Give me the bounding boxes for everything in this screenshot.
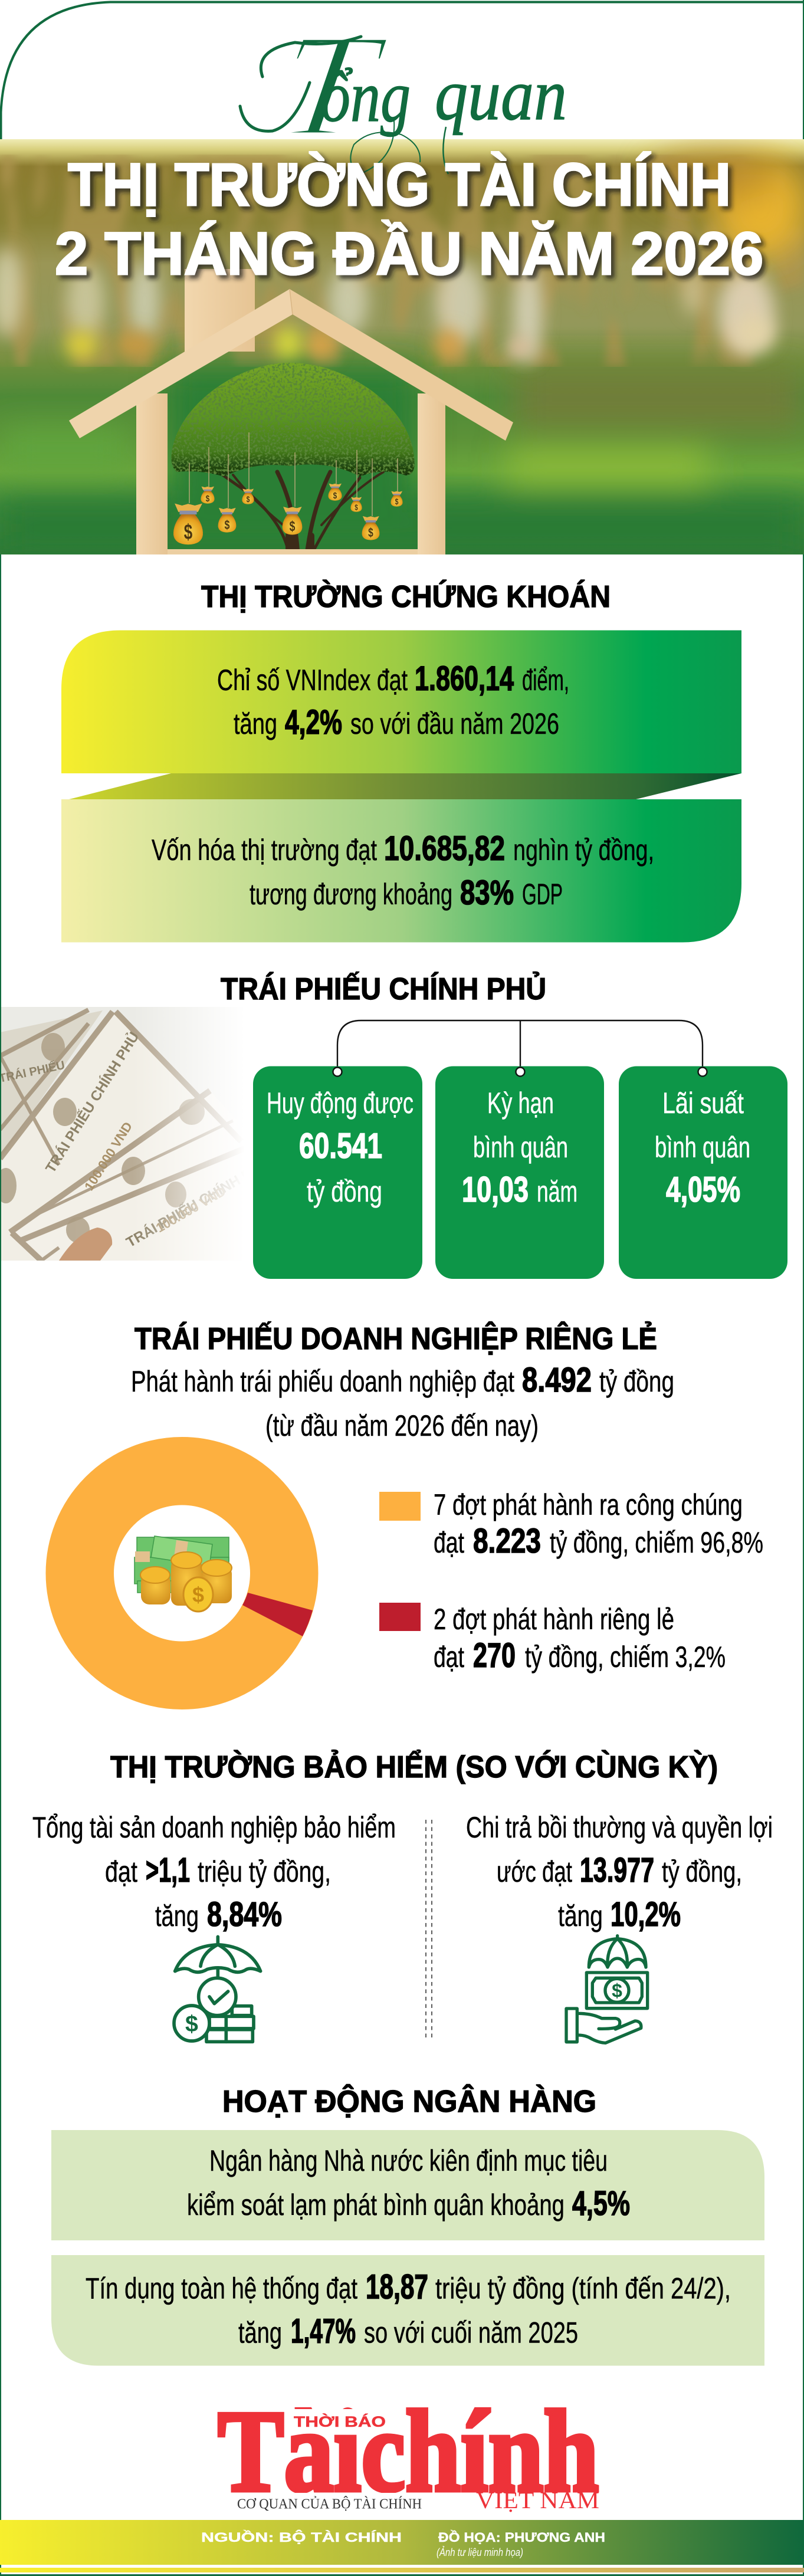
panel: average interest rate: bình quân xyxy=(655,1131,750,1164)
panel: amount raised xyxy=(253,1067,422,1279)
icon: money and coins: $ xyxy=(192,1583,204,1607)
text: insurance assets: tăng xyxy=(155,1899,199,1932)
text: market capitalization: 83% xyxy=(460,874,514,912)
text: insurance payouts: 10,2% xyxy=(611,1895,681,1934)
legend: private issuance: 2 đợt phát hành riêng lẻ xyxy=(434,1603,674,1636)
donut chart xyxy=(80,1471,313,1675)
text: corporate bonds summary: (từ đầu năm 2026 đến nay) xyxy=(265,1409,539,1442)
text: corporate bonds summary: Phát hành trái phiếu doanh nghiệp đạt xyxy=(131,1365,514,1398)
text: corporate bonds summary: tỷ đồng xyxy=(599,1365,674,1398)
ribbon top box xyxy=(61,630,741,773)
icon: umbrella, banknote and hand: $ xyxy=(612,1980,622,2001)
legend: private issuance: tỷ đồng, chiếm 3,2% xyxy=(525,1640,726,1673)
panel: system credit: triệu tỷ đồng (tính đến 24/2), xyxy=(435,2272,731,2305)
logo: Thời báo Tài chính Việt Nam: Tàichính xyxy=(218,2387,599,2516)
text: VNIndex: điểm, xyxy=(522,664,569,697)
icon: umbrella protecting coins: $ xyxy=(185,2011,198,2037)
money bags xyxy=(173,484,403,544)
panel: inflation target: kiểm soát lạm phát bình quân khoảng xyxy=(187,2188,565,2221)
title: Thị trường tài chính 2 tháng đầu năm 2026: THỊ TRƯỜNG TÀI CHÍNH xyxy=(68,151,731,218)
icon: umbrella, banknote and hand xyxy=(566,1936,648,2043)
icon: umbrella protecting coins xyxy=(174,1937,261,2042)
hero photo: wooden house and money tree xyxy=(0,139,804,554)
panel: system credit: 1,47% xyxy=(291,2312,356,2350)
panel: inflation target: 4,5% xyxy=(572,2184,630,2223)
text: VNIndex: Chỉ số VNIndex đạt xyxy=(217,664,408,697)
text: VNIndex: so với đầu năm 2026 xyxy=(350,707,559,740)
panel: average term xyxy=(435,1067,604,1279)
panel: system credit xyxy=(51,2255,764,2365)
text: insurance payouts: tăng xyxy=(558,1899,603,1932)
text: VNIndex: 4,2% xyxy=(285,703,342,741)
legend: public issuance xyxy=(379,1488,763,1560)
photo: government bond certificates: 100.000 VND xyxy=(81,1119,135,1193)
text: insurance assets: 8,84% xyxy=(207,1895,282,1934)
text: VNIndex: tăng xyxy=(234,707,277,740)
title: Thị trường tài chính 2 tháng đầu năm 2026 xyxy=(55,151,763,287)
logo: Thời báo Tài chính Việt Nam: THỜI BÁO xyxy=(294,2413,386,2430)
text: market capitalization: GDP xyxy=(522,878,563,911)
footer band: source and credits: NGUỒN: BỘ TÀI CHÍNH xyxy=(201,2530,402,2545)
panel: amount raised: 60.541 xyxy=(299,1126,382,1166)
logo: Thời báo Tài chính Việt Nam: CƠ QUAN CỦA BỘ TÀI CHÍNH xyxy=(237,2496,422,2512)
heading: government bonds: TRÁI PHIẾU CHÍNH PHỦ xyxy=(221,972,546,1006)
text: insurance assets: đạt xyxy=(105,1855,137,1888)
legend: private issuance: 270 xyxy=(473,1636,516,1675)
hanging strings xyxy=(189,432,398,516)
heading: corporate bonds: TRÁI PHIẾU DOANH NGHIỆP RIÊNG LẺ xyxy=(134,1321,657,1356)
photo: government bond certificates: TRÁI PHIẾU CHÍNH PHỦ xyxy=(123,1154,273,1251)
text: market capitalization xyxy=(152,829,654,912)
text: insurance assets xyxy=(32,1811,396,1934)
text: market capitalization: Vốn hóa thị trường đạt xyxy=(152,833,377,867)
text: corporate bonds summary xyxy=(131,1361,674,1442)
panel: average interest rate: Lãi suất xyxy=(662,1087,744,1120)
logo: Thời báo Tài chính Việt Nam: VIỆT NAM xyxy=(476,2487,599,2513)
panel: average term: Kỳ hạn xyxy=(487,1087,554,1120)
text: VNIndex xyxy=(217,659,569,741)
text: market capitalization: tương đương khoảng xyxy=(250,878,452,911)
blurred bokeh background xyxy=(0,150,804,554)
panel: average term: năm xyxy=(537,1175,577,1208)
heading: insurance market: THỊ TRƯỜNG BẢO HIỂM (SO VỚI CÙNG KỲ) xyxy=(110,1750,718,1784)
text: insurance payouts: ước đạt xyxy=(497,1855,572,1888)
panel: system credit: 18,87 xyxy=(366,2267,428,2306)
text: insurance payouts xyxy=(466,1811,773,1934)
panel: average interest rate: 4,05% xyxy=(666,1170,740,1209)
panel: inflation target xyxy=(51,2130,764,2240)
panel: system credit: Tín dụng toàn hệ thống đạt xyxy=(86,2272,357,2305)
text: insurance assets: triệu tỷ đồng, xyxy=(198,1855,331,1888)
text: insurance assets: Tổng tài sản doanh nghiệp bảo hiểm xyxy=(32,1811,396,1844)
text: market capitalization: nghìn tỷ đồng, xyxy=(513,833,654,867)
legend: public issuance: đạt xyxy=(434,1526,464,1559)
legend: private issuance: đạt xyxy=(434,1640,464,1673)
tree crown xyxy=(171,363,415,477)
title: Tổng quan xyxy=(240,4,567,174)
footer band: source and credits: ĐỒ HỌA: PHƯƠNG ANH xyxy=(438,2530,605,2545)
panel: stock market ribbon xyxy=(61,630,741,943)
panel: system credit: so với cuối năm 2025 xyxy=(364,2316,578,2349)
wooden house frame xyxy=(69,289,513,554)
panel: amount raised: tỷ đồng xyxy=(307,1175,382,1208)
panel: average term: bình quân xyxy=(473,1131,568,1164)
chimney xyxy=(185,269,255,352)
legend: public issuance: 8.223 xyxy=(473,1522,541,1560)
title: Thị trường tài chính 2 tháng đầu năm 2026: 2 THÁNG ĐẦU NĂM 2026 xyxy=(55,220,763,287)
title: Tổng quan: T xyxy=(268,4,394,167)
connector lines xyxy=(337,1020,703,1072)
title: Tổng quan: ổng xyxy=(320,56,411,137)
text: VNIndex: 1.860,14 xyxy=(415,659,514,698)
ribbon bottom box xyxy=(61,799,741,943)
text: corporate bonds summary: 8.492 xyxy=(522,1361,592,1399)
heading: stock market: THỊ TRƯỜNG CHỨNG KHOÁN xyxy=(201,580,611,614)
photo: government bond certificates: TRÁI PHIẾU CHÍNH PHỦ xyxy=(41,1029,142,1176)
panel: amount raised: Huy động được xyxy=(267,1087,414,1120)
text: insurance payouts: tỷ đồng, xyxy=(662,1855,742,1888)
heading: banking activity: HOẠT ĐỘNG NGÂN HÀNG xyxy=(222,2084,596,2119)
tree trunk and branches xyxy=(218,472,383,554)
footer band: source and credits: (Ảnh tư liệu minh họa) xyxy=(437,2546,523,2558)
title: Tổng quan: quan xyxy=(435,54,567,135)
text: insurance assets: >1,1 xyxy=(146,1851,190,1889)
ribbon fold xyxy=(69,773,741,799)
panel: inflation target: Ngân hàng Nhà nước kiên định mục tiêu xyxy=(209,2144,608,2177)
photo: government bond certificates: 100.000 VND xyxy=(153,1184,228,1235)
panel: average term: 10,03 xyxy=(462,1170,529,1209)
text: market capitalization: 10.685,82 xyxy=(384,829,505,868)
panel: average interest rate xyxy=(619,1067,787,1279)
footer band: source and credits xyxy=(0,2520,804,2572)
photo: government bond certificates xyxy=(1,1007,238,1261)
text: insurance payouts: 13.977 xyxy=(580,1851,654,1889)
legend: private issuance xyxy=(379,1603,726,1675)
icon: money and coins xyxy=(134,1536,232,1612)
panel: system credit: tăng xyxy=(238,2316,282,2349)
